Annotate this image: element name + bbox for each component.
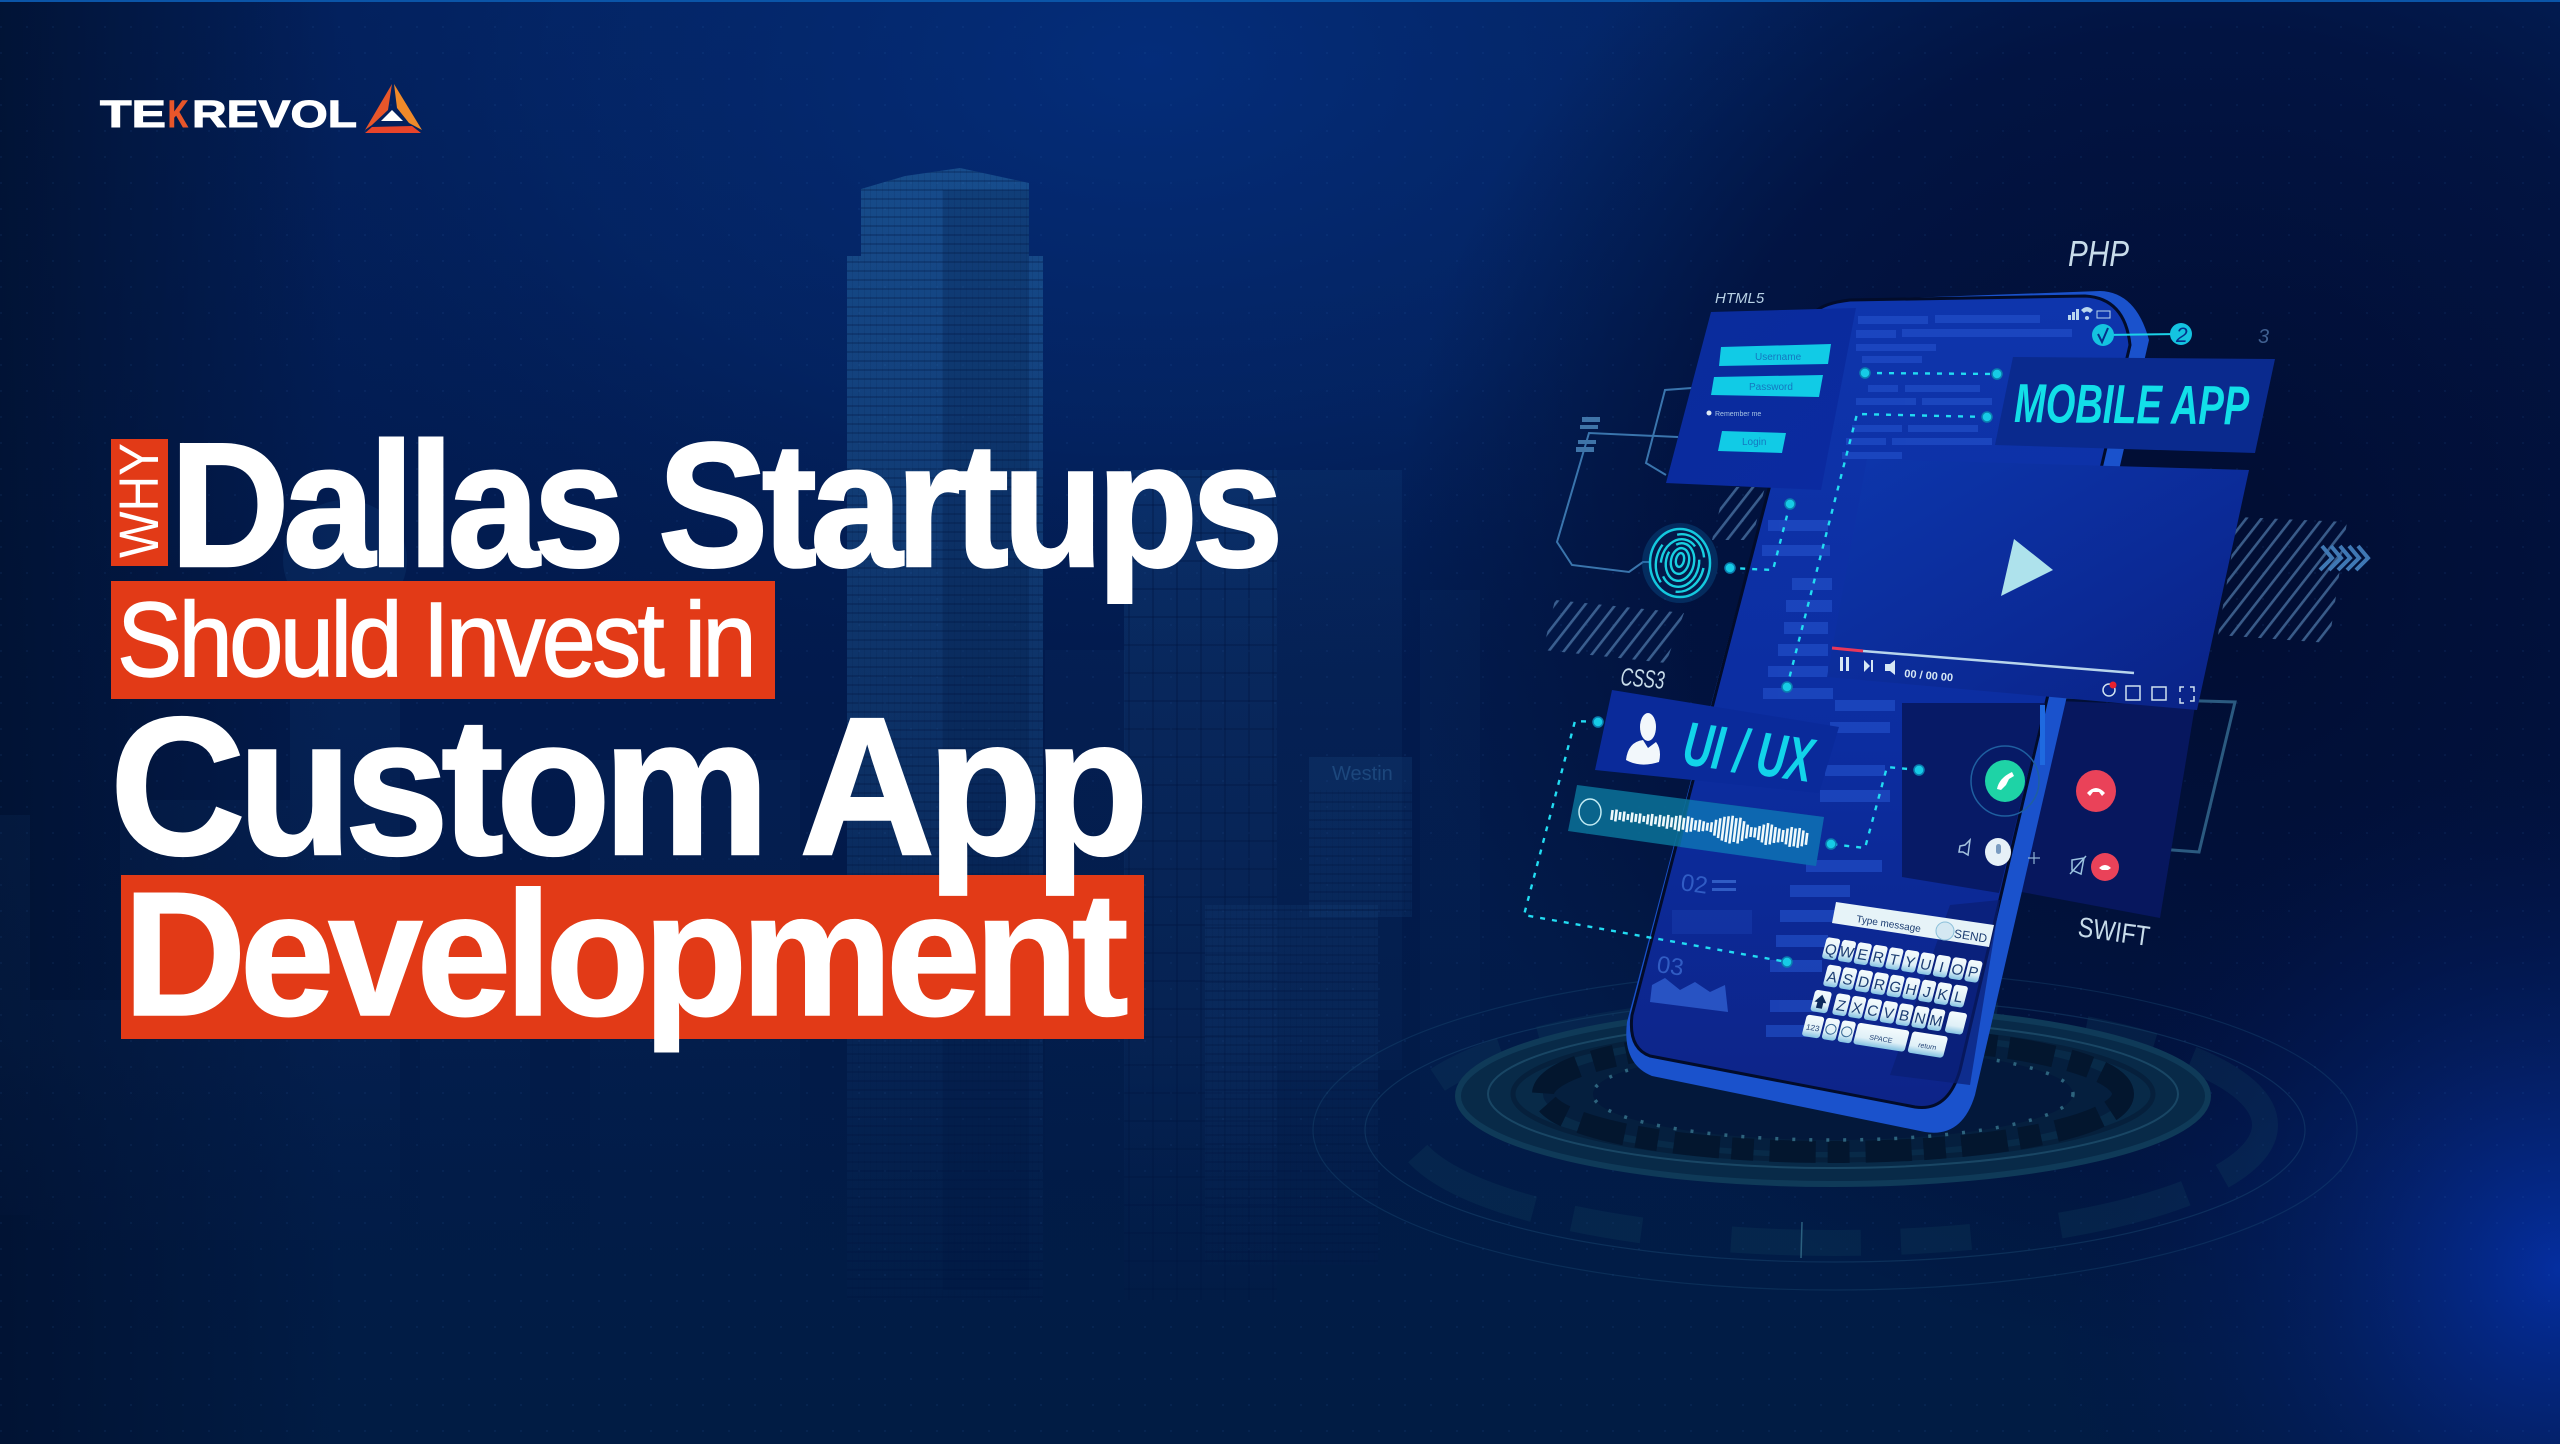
city skyline bbox=[0, 168, 1480, 1300]
logo wordmark: TE bbox=[100, 94, 166, 136]
keys: O bbox=[1949, 961, 1965, 979]
small end call button bbox=[2091, 853, 2119, 881]
keys bbox=[1802, 937, 1983, 1060]
keys: return bbox=[1917, 1042, 1937, 1052]
chart card 02 bbox=[1672, 869, 1752, 934]
message input: SEND bbox=[1953, 927, 1989, 946]
connector nodes bbox=[1593, 368, 2002, 967]
fingerprint icon bbox=[1642, 523, 1718, 603]
password field: Password bbox=[1749, 382, 1793, 393]
white mic button bbox=[1985, 838, 2011, 866]
hatch right bbox=[2218, 517, 2347, 643]
login panel: HTML5 bbox=[1715, 290, 1765, 307]
line: Custom App: Custom App bbox=[110, 677, 1141, 896]
keys: Y bbox=[1903, 954, 1917, 972]
keys: W bbox=[1837, 943, 1857, 962]
chevron arrows bbox=[2320, 546, 2368, 570]
logo triangle icon bbox=[365, 84, 422, 133]
chart card 03: 03 bbox=[1655, 951, 1685, 982]
side button stripe bbox=[2040, 705, 2045, 765]
mute icon bbox=[2070, 856, 2086, 874]
keys: E bbox=[1855, 946, 1869, 964]
phone body bbox=[1626, 291, 2149, 1133]
step indicator: 2 bbox=[2175, 324, 2188, 347]
holographic platform bbox=[1313, 970, 2357, 1290]
keys: X bbox=[1850, 1000, 1864, 1018]
keys: P bbox=[1966, 964, 1980, 982]
status icons bbox=[2068, 307, 2110, 320]
keys: Z bbox=[1834, 997, 1848, 1015]
logo wordmark bbox=[100, 94, 357, 136]
person icon bbox=[1626, 713, 1660, 765]
plus mark bbox=[2028, 852, 2040, 864]
login button bbox=[1718, 431, 1786, 453]
UI / UX panel: UI / UX bbox=[1679, 710, 1820, 796]
highlight bar: Should Invest in: Should Invest in bbox=[117, 581, 753, 699]
login button: Login bbox=[1742, 437, 1766, 448]
stacked dashes bbox=[1576, 417, 1600, 452]
logo: Tekrevol bbox=[100, 84, 422, 136]
player controls: 00 / 00 00 bbox=[1904, 668, 1954, 684]
keys: B bbox=[1897, 1007, 1911, 1025]
login panel bbox=[1666, 290, 1856, 490]
keys: SPACE bbox=[1868, 1034, 1893, 1045]
keys: H bbox=[1904, 981, 1918, 999]
call screen area bbox=[1902, 703, 2045, 893]
technology labels bbox=[1619, 233, 2152, 952]
player controls bbox=[1840, 657, 1954, 684]
message input bbox=[1832, 902, 1994, 947]
step indicator: 3 bbox=[2258, 326, 2269, 348]
circuit outlines bbox=[1557, 388, 1692, 572]
keys: T bbox=[1887, 951, 1901, 969]
keys: S bbox=[1841, 971, 1855, 989]
logo wordmark: K bbox=[168, 94, 188, 136]
hatch left small bbox=[1712, 487, 1765, 540]
hatch left large bbox=[1543, 600, 1684, 663]
keys: K bbox=[1936, 986, 1950, 1004]
logo wordmark: REVOL bbox=[192, 94, 357, 136]
user avatar icon bbox=[1579, 799, 1601, 825]
mobile app panel: MOBILE APP bbox=[2014, 372, 2250, 436]
step indicator bbox=[2092, 323, 2269, 348]
call panel behind phone bbox=[2000, 700, 2195, 918]
keys: A bbox=[1825, 969, 1839, 987]
technology labels: SWIFT bbox=[2076, 911, 2152, 952]
keys: D bbox=[1856, 973, 1871, 992]
keys: J bbox=[1921, 984, 1933, 1001]
remember me: Remember me bbox=[1715, 411, 1761, 418]
keys: I bbox=[1937, 959, 1946, 976]
keys: R bbox=[1871, 949, 1886, 967]
username field: Username bbox=[1755, 352, 1802, 363]
message input: Type message bbox=[1856, 914, 1922, 935]
chart card 03 bbox=[1650, 951, 1728, 1012]
play icon bbox=[2001, 539, 2053, 596]
call frame outline bbox=[2048, 697, 2235, 852]
phone screen bbox=[1631, 296, 2130, 1108]
line: Dallas Startups: Dallas Startups bbox=[170, 406, 1278, 604]
keys: U bbox=[1918, 956, 1933, 974]
username field bbox=[1719, 344, 1831, 366]
keyboard bbox=[1802, 902, 1994, 1060]
keys: L bbox=[1952, 989, 1965, 1006]
city skyline: Westin bbox=[1332, 763, 1393, 785]
video player panel bbox=[1827, 459, 2249, 710]
keys: G bbox=[1887, 978, 1903, 997]
background outline lines and hatching bbox=[1543, 388, 2368, 852]
password field bbox=[1711, 375, 1823, 397]
keys: M bbox=[1928, 1012, 1944, 1030]
waveform bbox=[1610, 801, 1808, 853]
mobile app panel bbox=[1995, 357, 2275, 453]
keys: V bbox=[1881, 1005, 1895, 1023]
UI / UX panel bbox=[1595, 690, 1839, 796]
voice message bar bbox=[1568, 785, 1824, 866]
code lines on screen bbox=[1762, 315, 2072, 1037]
headline bbox=[107, 406, 1278, 1053]
WHY label: WHY bbox=[107, 443, 170, 558]
keys: R bbox=[1872, 976, 1887, 994]
keys: N bbox=[1913, 1010, 1928, 1028]
technology labels: PHP bbox=[2068, 233, 2129, 274]
speaker icon bbox=[1959, 840, 1970, 855]
keys: Q bbox=[1823, 941, 1839, 959]
green answer button bbox=[1971, 746, 2039, 816]
dotted connectors bbox=[1524, 368, 2002, 967]
keys: C bbox=[1865, 1002, 1880, 1020]
end call button bbox=[2076, 770, 2116, 812]
keys: 123 bbox=[1805, 1023, 1821, 1033]
highlight bar: Development: Development bbox=[123, 855, 1127, 1053]
chart card 02: 02 bbox=[1679, 869, 1709, 900]
progress bar bbox=[1863, 651, 2134, 673]
dark stripe under screen bbox=[1890, 900, 2000, 1085]
technology labels: CSS3 bbox=[1619, 663, 1666, 695]
phone bbox=[1626, 291, 2149, 1133]
